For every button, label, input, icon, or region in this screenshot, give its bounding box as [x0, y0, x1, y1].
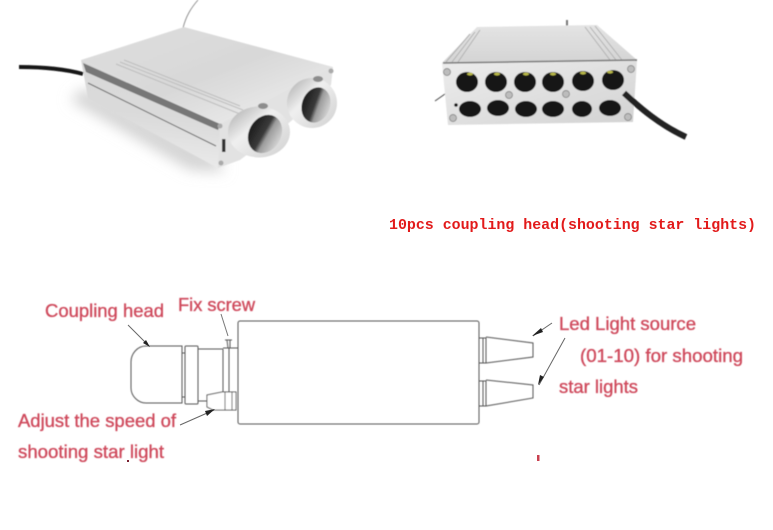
small red mark — [537, 455, 540, 461]
photo: light engine front panel with twelve ports — [435, 20, 686, 137]
technical diagram — [131, 321, 533, 424]
dark edge band — [83, 63, 220, 130]
panel screws — [444, 66, 634, 122]
coupling head cap — [131, 346, 182, 403]
collar — [223, 348, 238, 392]
front plate — [218, 67, 333, 168]
clamp screws — [258, 103, 268, 109]
diagram labels — [18, 295, 743, 462]
label: fix screw: Fix screw — [178, 295, 256, 315]
upper row ports — [456, 70, 624, 92]
casing fins — [446, 26, 622, 62]
indicator dot — [454, 103, 458, 107]
arrow: fix screw — [221, 314, 228, 336]
fix screw — [225, 340, 232, 348]
arrow: lower led — [538, 338, 565, 385]
heading: coupling head caption: 10pcs coupling head(shooting star lights) — [389, 217, 756, 234]
label: led light source: Led Light source — [559, 314, 696, 334]
label: adjust speed line 1: Adjust the speed of — [18, 411, 177, 431]
casing top — [442, 25, 637, 63]
neck — [182, 349, 223, 401]
label: adjust speed line 2: shooting star light — [18, 442, 164, 462]
corner screws — [218, 124, 222, 128]
lower lens connector — [479, 380, 533, 406]
label: star lights: star lights — [559, 377, 638, 397]
arrow: upper led — [532, 323, 552, 336]
speed adjuster — [207, 392, 236, 410]
yellow LED glints — [467, 70, 613, 76]
antenna stub — [566, 20, 568, 27]
label: 01-10 for shooting: (01-10) for shooting — [580, 346, 743, 366]
main body — [238, 321, 479, 424]
casing top — [81, 27, 333, 125]
black power cable — [19, 67, 83, 74]
arrow: adjust speed — [180, 409, 215, 425]
photo: shooting star light engine, angled view — [19, 0, 337, 172]
top edge line — [443, 60, 637, 63]
label: coupling head: Coupling head — [45, 301, 164, 321]
small port — [222, 139, 226, 152]
fins — [116, 60, 243, 114]
power cable — [624, 93, 686, 137]
flange — [185, 346, 198, 404]
small dark mark — [127, 460, 129, 462]
antenna wire — [183, 0, 198, 28]
front ring — [228, 106, 290, 159]
arrow: coupling head — [128, 325, 150, 347]
seam on casing — [88, 83, 216, 146]
rear ring — [287, 78, 337, 128]
lower row ports — [459, 100, 621, 117]
front face — [442, 60, 637, 125]
shadow — [70, 88, 225, 172]
thin wire — [435, 87, 455, 101]
upper lens connector — [479, 337, 533, 363]
casing side — [81, 60, 222, 168]
